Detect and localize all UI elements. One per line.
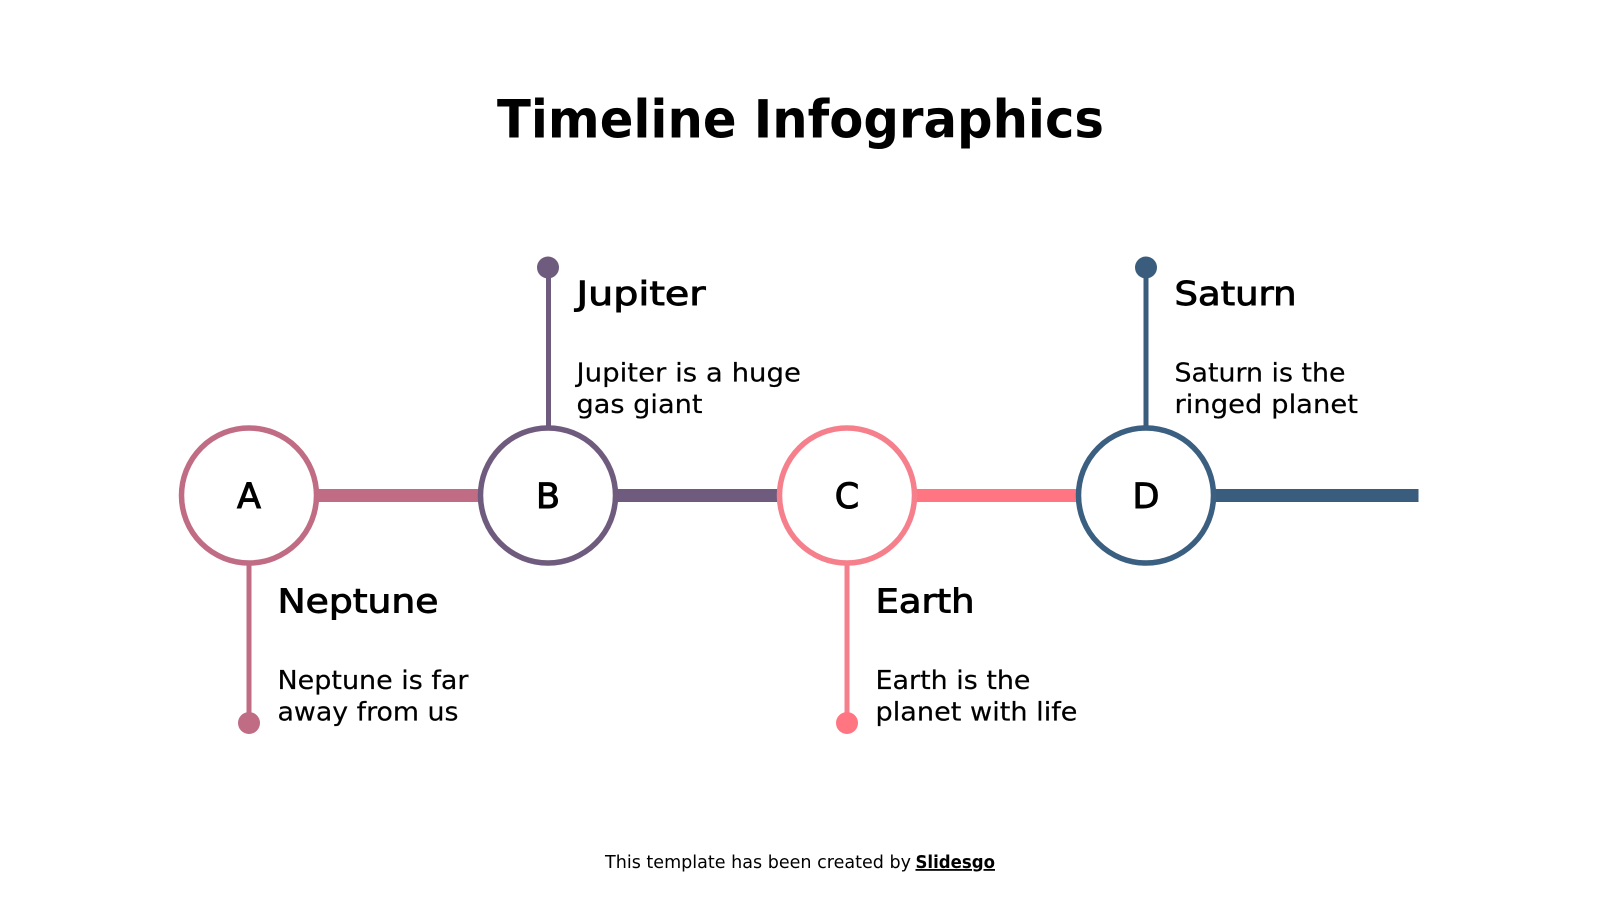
description Jupiter bbox=[574, 358, 801, 420]
description Neptune: away from us bbox=[278, 698, 458, 728]
connector B bbox=[546, 267, 551, 427]
heading Saturn: Saturn bbox=[1174, 274, 1296, 313]
circle A bbox=[182, 428, 316, 563]
connector D bbox=[1144, 267, 1148, 427]
dot C bbox=[836, 712, 858, 734]
letter D: D bbox=[1133, 477, 1159, 517]
dot D bbox=[1135, 256, 1157, 278]
description Saturn: Saturn is the bbox=[1174, 358, 1346, 388]
letter A: A bbox=[237, 477, 261, 517]
circle B bbox=[480, 428, 616, 563]
description Neptune bbox=[278, 666, 469, 728]
dot A bbox=[238, 712, 260, 734]
description Earth bbox=[876, 666, 1078, 728]
description Saturn bbox=[1174, 358, 1358, 420]
title: Timeline Infographics bbox=[497, 90, 1104, 150]
description Neptune: Neptune is far bbox=[278, 666, 469, 696]
timeline bar segments bbox=[315, 489, 1418, 502]
connector A bbox=[246, 563, 252, 722]
milestone B: Jupiter bbox=[480, 256, 801, 563]
circle D bbox=[1078, 428, 1214, 563]
footer credit: Slidesgo bbox=[916, 852, 995, 873]
description Earth: Earth is the bbox=[876, 666, 1030, 696]
description Jupiter: Jupiter is a huge bbox=[574, 358, 801, 388]
letter C: C bbox=[835, 477, 859, 517]
heading Jupiter: Jupiter bbox=[574, 274, 706, 313]
connector C bbox=[844, 563, 850, 722]
circle C bbox=[780, 428, 914, 563]
milestone A: Neptune bbox=[182, 428, 469, 734]
description Earth: planet with life bbox=[876, 698, 1078, 728]
milestone C: Earth bbox=[780, 428, 1078, 734]
dot B bbox=[537, 256, 559, 278]
description Jupiter: gas giant bbox=[576, 390, 702, 420]
footer credit: This template has been created by bbox=[604, 852, 911, 873]
heading Earth: Earth bbox=[876, 582, 974, 620]
milestone D: Saturn bbox=[1078, 256, 1358, 563]
heading Neptune: Neptune bbox=[278, 582, 438, 620]
letter B: B bbox=[536, 477, 560, 517]
description Saturn: ringed planet bbox=[1174, 390, 1358, 420]
